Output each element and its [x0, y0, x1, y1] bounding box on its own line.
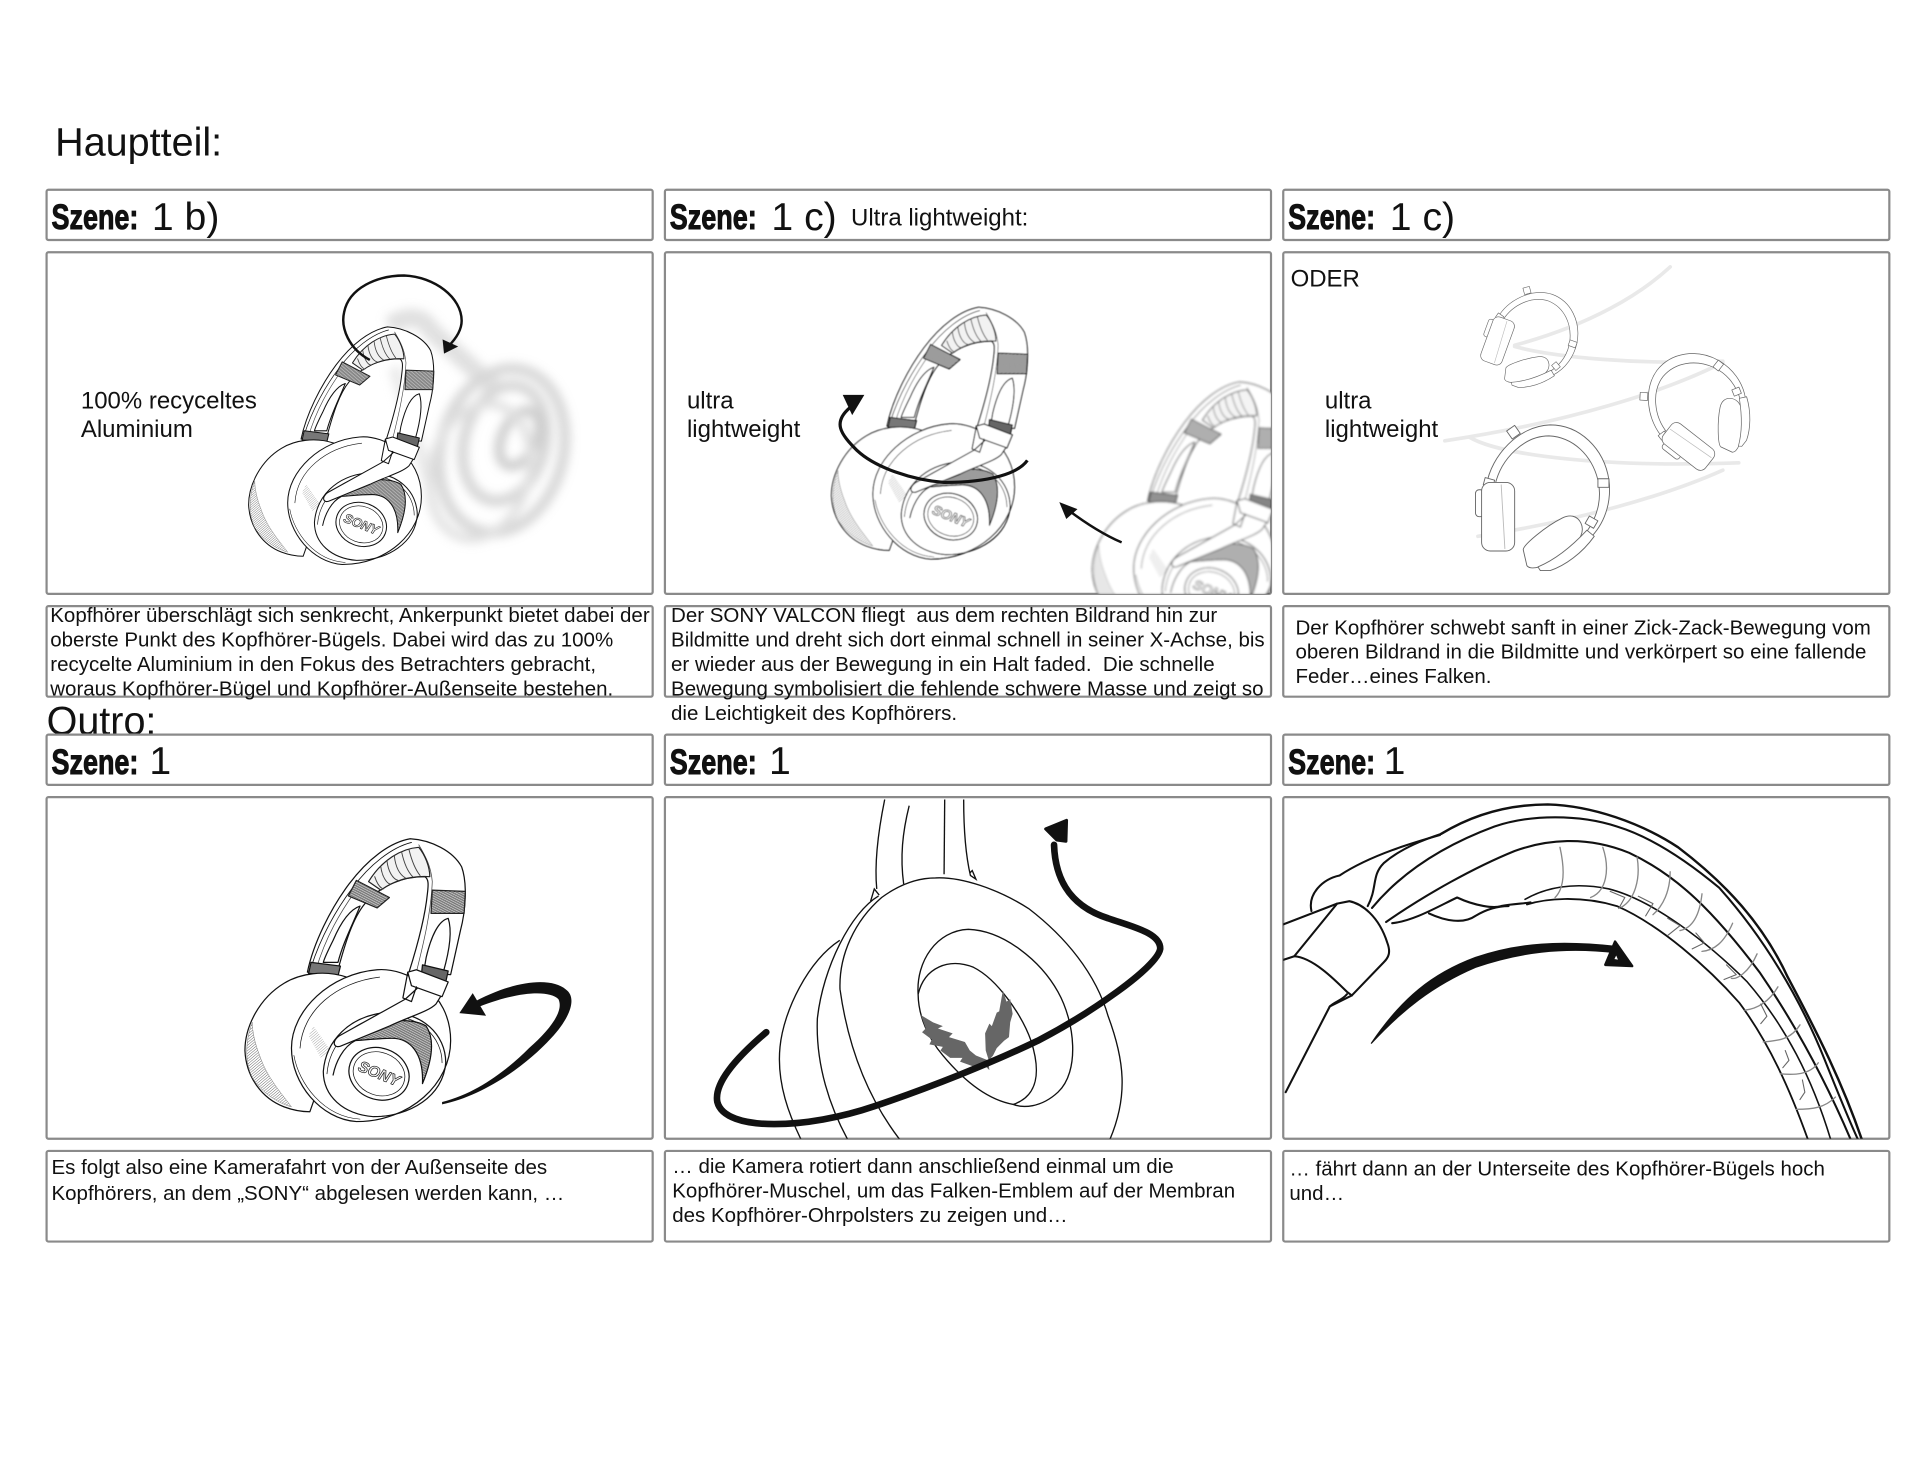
- entry arrow: [1060, 503, 1122, 542]
- scene header 1 b: Szene:: [51, 197, 138, 237]
- rotation arrow: [343, 275, 462, 360]
- label: ultra lightweight: lightweight: [687, 416, 801, 443]
- description 1 c: Bildmitte und dreht sich dort einmal schnell in seiner X-Achse, bis: [671, 628, 1265, 651]
- scene header 1 c: 1 c): [1390, 196, 1455, 239]
- label: recycled aluminium: Aluminium: [81, 416, 193, 443]
- scene header 1 c: [1283, 190, 1889, 240]
- falling headphone right: [1621, 334, 1775, 486]
- description: [47, 1151, 653, 1242]
- description: und…: [1289, 1182, 1344, 1205]
- label: ultra lightweight: ultra: [687, 387, 734, 414]
- description: [1283, 1151, 1889, 1242]
- image frame: [1283, 797, 1889, 1139]
- falling headphone top: [1471, 277, 1590, 401]
- scene header: 1: [769, 740, 791, 783]
- description 1 c: Der SONY VALCON fliegt aus dem rechten Bildrand hin zur: [671, 604, 1217, 627]
- scene header: [47, 735, 653, 785]
- image frame: [47, 797, 653, 1139]
- scene header: 1: [1384, 740, 1405, 783]
- description 1 b: Kopfhörer überschlägt sich senkrecht, Ankerpunkt bietet dabei der: [50, 604, 650, 627]
- headphone sketch: [831, 307, 1028, 559]
- label: ODER: ODER: [1291, 266, 1360, 293]
- description alternative: Der Kopfhörer schwebt sanft in einer Zick-Zack-Bewegung vom: [1295, 616, 1871, 639]
- image frame 1 b: [47, 252, 653, 594]
- label: recycled aluminium: 100% recyceltes: [81, 387, 257, 414]
- description: … fährt dann an der Unterseite des Kopfhörer-Bügels hoch: [1289, 1157, 1825, 1180]
- scene header 1 c with title: [665, 190, 1271, 240]
- scene header 1 c with title: Szene:: [670, 197, 757, 237]
- description: … die Kamera rotiert dann anschließend einmal um die: [672, 1155, 1174, 1178]
- scene header: 1: [149, 740, 171, 783]
- description: Kopfhörers, an dem „SONY“ abgelesen werden kann, …: [51, 1182, 564, 1205]
- scene header 1 c: Szene:: [1288, 197, 1375, 237]
- panel: scene 1 b: [47, 190, 653, 700]
- rotation arrow: [840, 395, 1027, 482]
- description: Es folgt also eine Kamerafahrt von der Außenseite des: [51, 1156, 547, 1179]
- scene header: [665, 735, 1271, 785]
- headphone sketch: [245, 839, 465, 1122]
- falcon emblem: [921, 991, 1013, 1070]
- description 1 c: er wieder aus der Bewegung in ein Halt faded. Die schnelle: [671, 653, 1215, 676]
- heading: Outro: Outro:: [47, 700, 156, 744]
- label: ultra lightweight: ultra: [1325, 387, 1372, 414]
- description 1 c: Bewegung symbolisiert die fehlende schwere Masse und zeigt so: [671, 677, 1264, 700]
- blurred headphones entering: [1090, 380, 1271, 594]
- headphone sketch: [249, 327, 434, 565]
- description 1 b: oberste Punkt des Kopfhörer-Bügels. Dabei wird das zu 100%: [50, 628, 613, 651]
- label: ultra lightweight: [687, 387, 801, 443]
- scene header 1 c with title: Ultra lightweight:: [851, 204, 1028, 231]
- panel: outro scene 1 ear cup: [665, 735, 1271, 1242]
- panel: outro scene 1 camera outside: [47, 735, 653, 1242]
- feather motion trails: [1445, 267, 1739, 536]
- description 1 c: die Leichtigkeit des Kopfhörers.: [671, 702, 957, 725]
- image frame: [665, 797, 1271, 1139]
- panel: outro scene 1 headband: [1283, 735, 1889, 1242]
- scene header: Szene:: [670, 742, 757, 782]
- falling headphone bottom: [1475, 425, 1610, 571]
- scene header 1 b: 1 b): [152, 196, 219, 239]
- description alternative: oberen Bildrand in die Bildmitte und verkörpert so eine fallende: [1295, 641, 1866, 664]
- description alternative: Feder…eines Falken.: [1295, 665, 1491, 688]
- description 1 b: [47, 604, 653, 700]
- ear cup line drawing: [779, 800, 1122, 1141]
- description 1 c: [665, 604, 1271, 725]
- heading: Hauptteil: Hauptteil:: [55, 121, 222, 165]
- label: recycled aluminium: [81, 387, 257, 443]
- scene header: Szene:: [51, 742, 138, 782]
- image frame alternative: [1283, 252, 1889, 594]
- description 1 b: woraus Kopfhörer-Bügel und Kopfhörer-Außenseite bestehen.: [49, 677, 613, 700]
- description: Kopfhörer-Muschel, um das Falken-Emblem auf der Membran: [672, 1179, 1235, 1202]
- scene header 1 b: [47, 190, 653, 240]
- scene header: [1283, 735, 1889, 785]
- ghost motion blur headphones: [389, 318, 583, 550]
- panel: scene 1 c lightweight: [665, 190, 1288, 725]
- label: ultra lightweight: [1325, 387, 1439, 443]
- scene header: Szene:: [1288, 742, 1375, 782]
- panel: scene 1 c alternative: [1283, 190, 1889, 697]
- description: des Kopfhörer-Ohrpolsters zu zeigen und…: [672, 1204, 1068, 1227]
- scene header 1 c with title: 1 c): [771, 196, 837, 239]
- image frame 1 c: [665, 252, 1271, 594]
- arrow along headband: [1371, 942, 1632, 1043]
- curved arrow: [442, 982, 571, 1104]
- headband close-up: [1283, 804, 1862, 1141]
- storyboard page: [46, 126, 1890, 1243]
- label: ultra lightweight: lightweight: [1325, 416, 1439, 443]
- description: [665, 1151, 1271, 1242]
- description 1 b: recycelte Aluminium in den Fokus des Betrachters gebracht,: [50, 653, 596, 676]
- description alternative: [1283, 606, 1889, 697]
- orbit arrow: [717, 820, 1160, 1124]
